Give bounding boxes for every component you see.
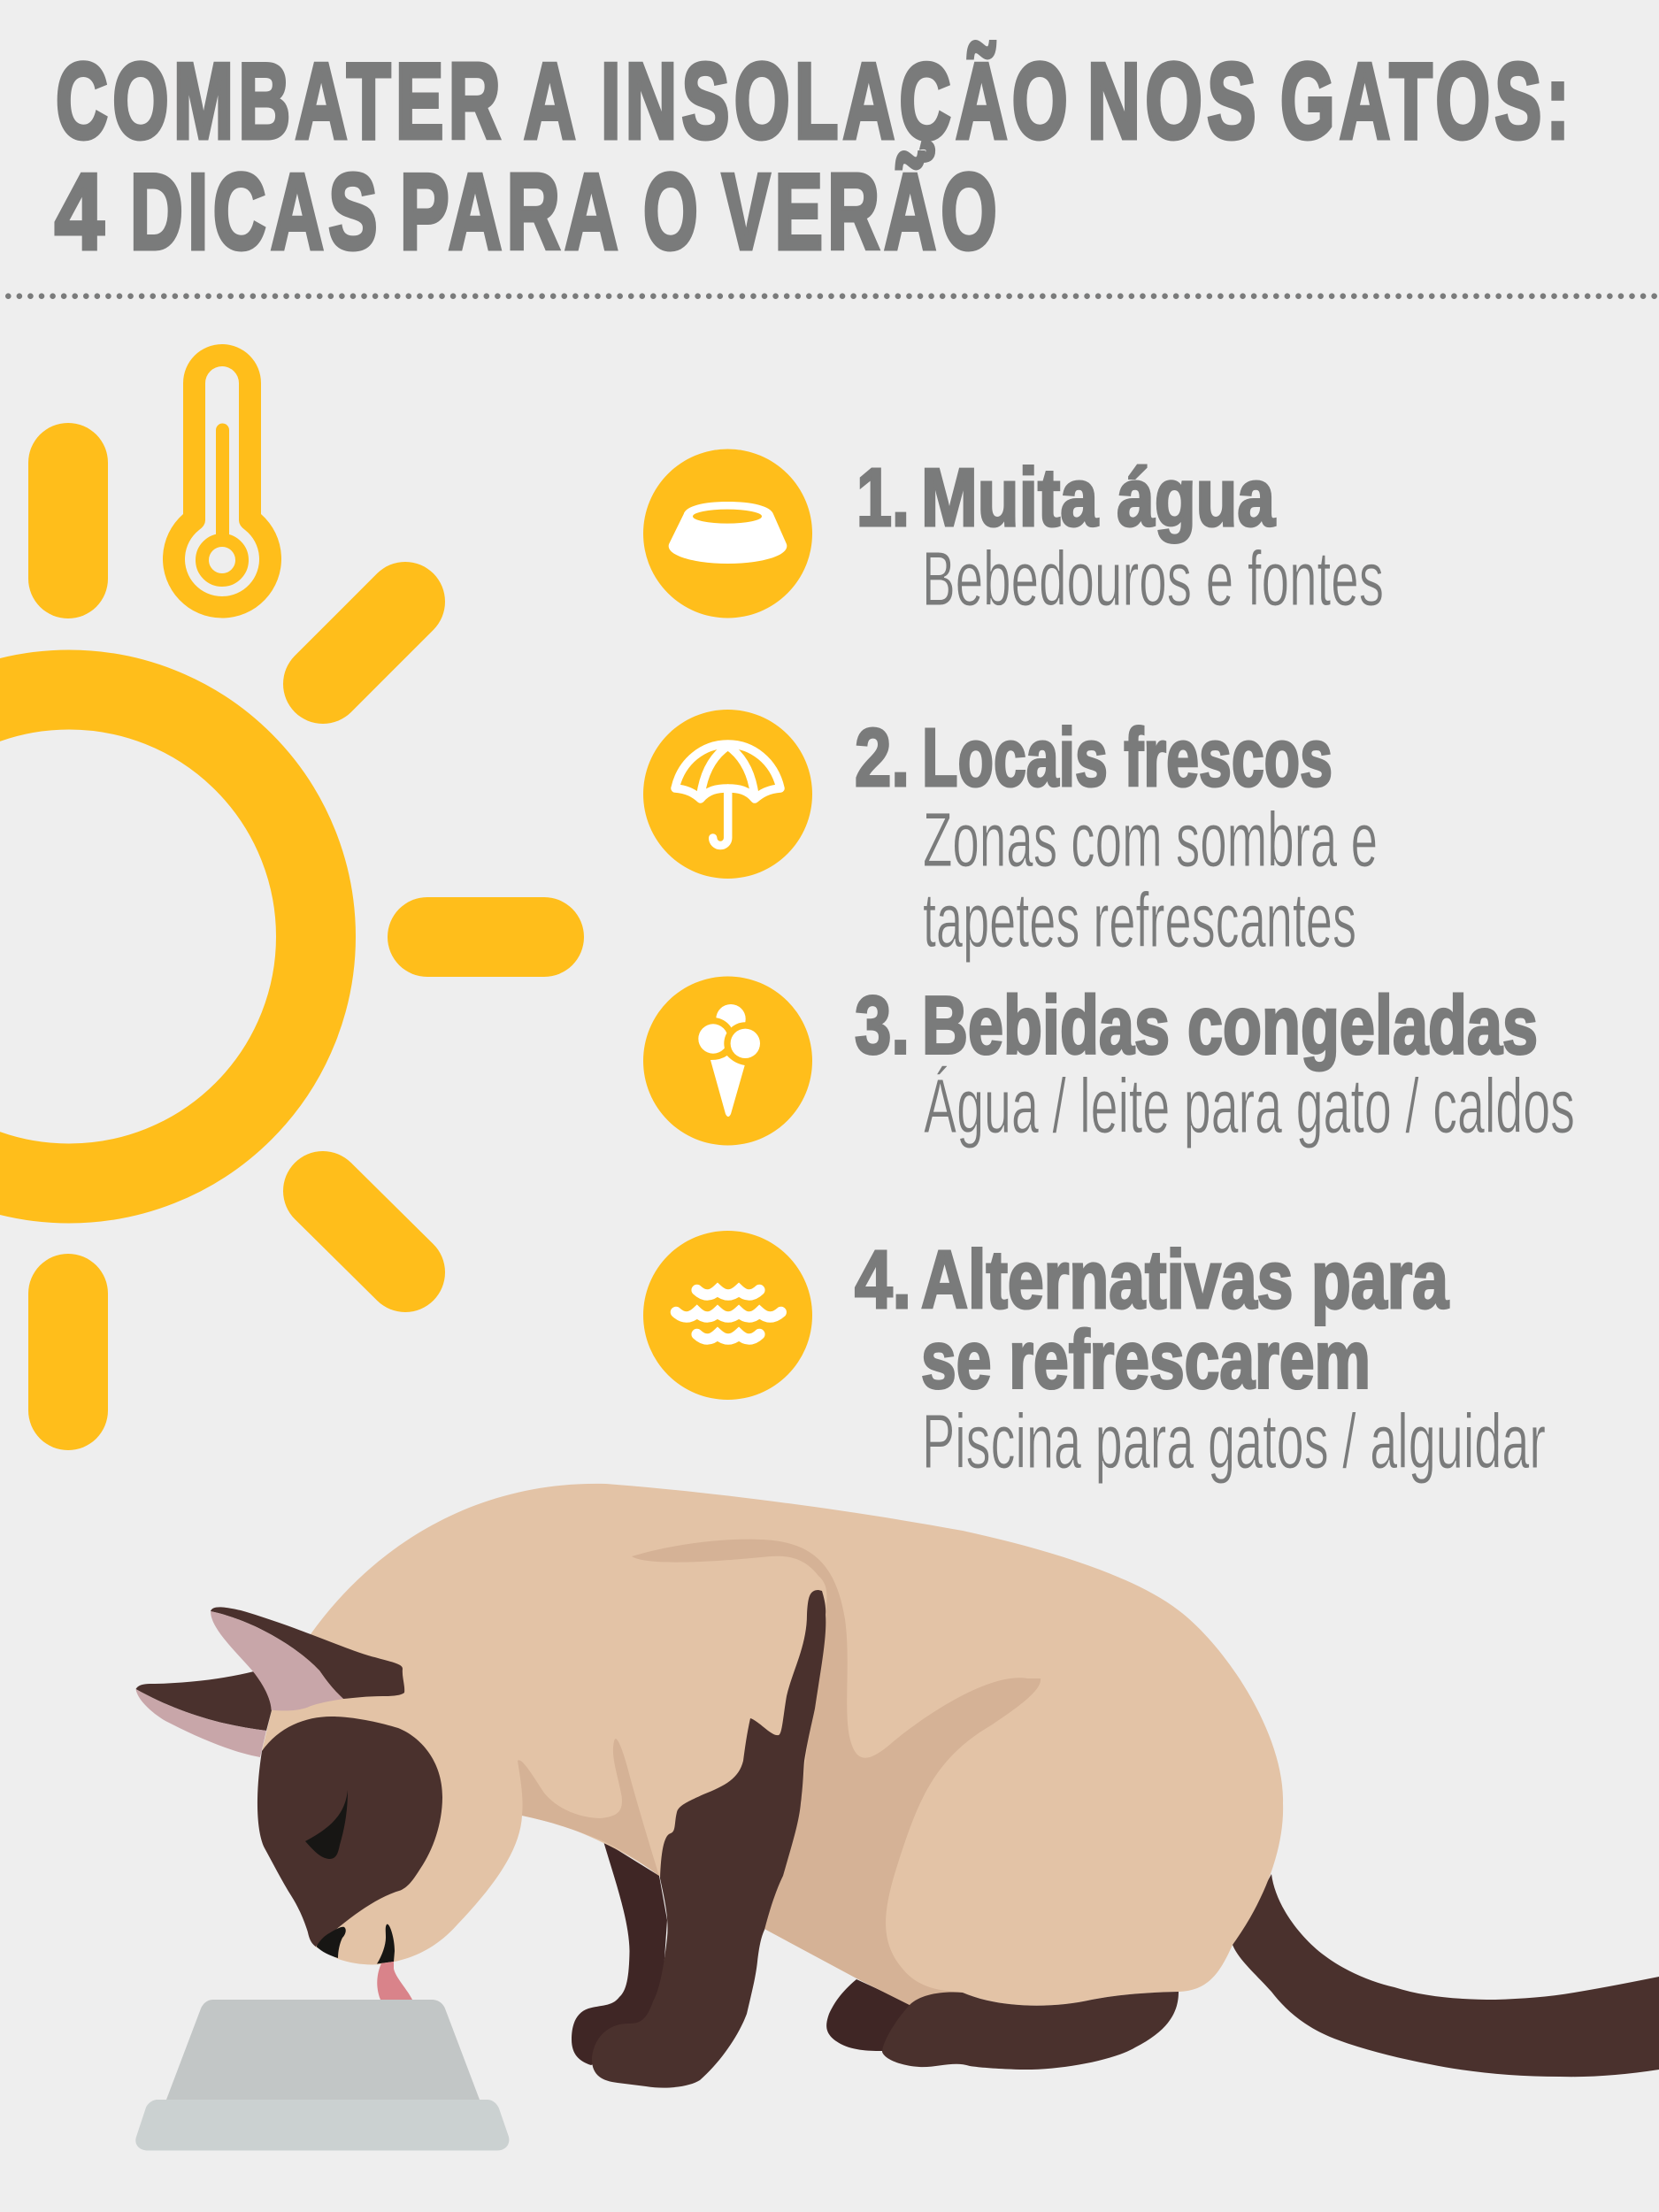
title: NOS	[1087, 41, 1261, 161]
heading: 3.	[855, 979, 910, 1071]
cat tongue	[377, 1962, 412, 2000]
description: Zonas com sombra e	[923, 797, 1378, 883]
near hind foot	[882, 1992, 1179, 2070]
description	[923, 797, 1378, 964]
heading	[855, 711, 1333, 803]
near ear	[211, 1607, 404, 1710]
cat tail	[1233, 1874, 1659, 2077]
near front leg	[592, 1590, 826, 2088]
cat eye	[305, 1790, 348, 1859]
tip 3: frozen drinks	[643, 977, 1575, 1149]
heading	[855, 1233, 1449, 1405]
title: 4	[55, 151, 110, 272]
illustration: siamese cat drinking	[135, 1484, 1659, 2150]
icon: umbrella	[643, 710, 812, 879]
heading: Muita água	[921, 451, 1276, 543]
title: A	[524, 41, 580, 161]
far front leg	[572, 1841, 667, 2065]
title: PARA	[400, 151, 623, 272]
icon: thermometer	[163, 344, 281, 618]
title: COMBATER	[56, 41, 505, 161]
water bowl	[135, 2000, 509, 2150]
cat body	[262, 1484, 1283, 2006]
title: O	[643, 151, 703, 272]
icon: water waves	[643, 1231, 812, 1400]
icon: water bowl	[643, 449, 812, 618]
title: DICAS	[130, 151, 382, 272]
description: tapetes refrescantes	[923, 878, 1356, 964]
description: Bebedouros e fontes	[922, 536, 1384, 622]
cat mouth	[377, 1924, 395, 1964]
tip 4: cooling alternatives	[643, 1231, 1546, 1485]
body shadow: tail-side flank and belly	[632, 1540, 1041, 2005]
heading: 2.	[855, 711, 910, 803]
icon: sun	[0, 463, 544, 1410]
icon: ice cream	[643, 977, 812, 1145]
chest shadow	[518, 1739, 659, 1876]
title	[55, 41, 1574, 272]
heading: Alternativas para	[921, 1233, 1449, 1325]
cat face mask	[257, 1717, 442, 1947]
tip 1: plenty of water	[643, 449, 1384, 622]
heading: 4.	[855, 1233, 911, 1325]
title: VERÃO	[722, 151, 1002, 272]
tip 2: cool places	[643, 710, 1378, 964]
cat nose	[317, 1927, 346, 1958]
far hind foot	[826, 1979, 920, 2051]
far ear	[136, 1671, 272, 1757]
heading: 1.	[856, 451, 910, 543]
title: INSOLAÇÃO	[601, 41, 1072, 161]
heading: se refrescarem	[921, 1313, 1371, 1405]
heading: Locais frescos	[922, 711, 1333, 803]
